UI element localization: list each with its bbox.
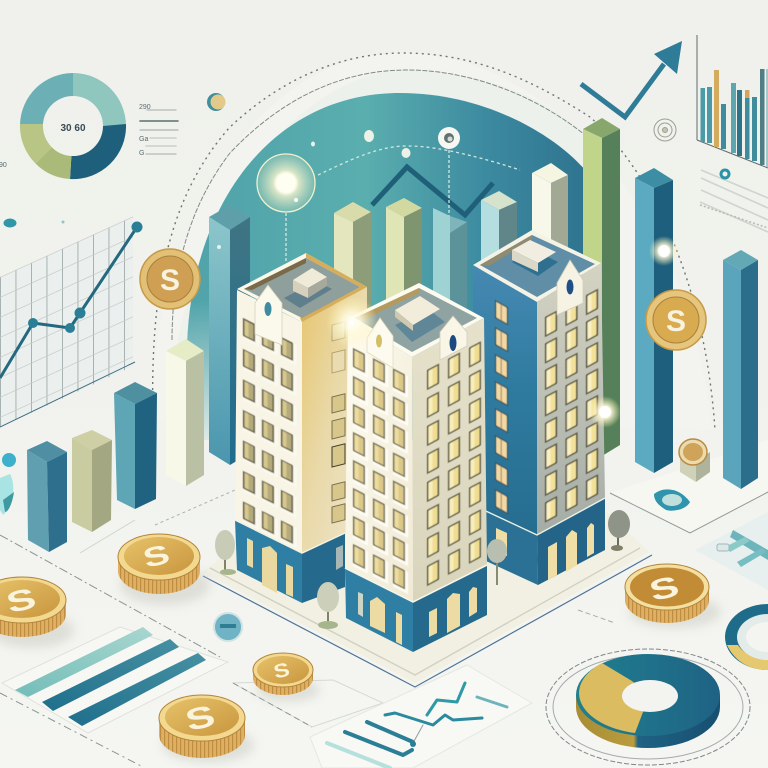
arch [255,285,282,345]
donut legend [139,104,178,157]
coin: top left: S [160,264,180,297]
chart line [0,227,137,378]
donut chart top left [20,73,126,179]
roof [348,283,484,357]
left facade [345,318,413,602]
partial donut right edge [725,604,768,670]
donut chart bottom right [546,649,750,765]
shield badge [654,489,690,511]
floor panels and dashed guide lines [0,440,768,767]
bar: teal left [114,382,157,509]
stripes chart bottom left [15,627,206,726]
bar: olive left [72,430,112,532]
base [345,568,413,652]
pale band behind dome [172,70,585,400]
coin: mid left: S [140,539,173,574]
left line chart with grid [0,216,142,427]
coin: mid left [118,534,210,605]
trees [215,510,630,629]
dome line chart [372,167,493,215]
coin: far left: S [2,582,40,619]
bar: olive tall right [583,118,620,456]
coin: bottom right [625,564,721,628]
base [473,505,538,585]
right windows [545,288,599,529]
bar: blue right 1 [635,168,673,473]
donut legend: G [139,150,144,157]
roof [237,253,367,322]
bar chart top right [697,35,768,168]
chart nodes [28,222,142,333]
left windows [351,347,409,600]
dome teal shape [187,93,585,440]
dome lower fade [183,300,213,460]
building 2 (center) [345,283,487,652]
bar: cream left [166,339,204,486]
hole [622,680,678,712]
dotted outer arc [153,53,715,430]
right windows [332,322,345,523]
left facade [473,265,537,535]
roof [473,230,601,302]
right data panel [695,512,768,590]
bar: cream dome 5 [532,163,568,280]
left facade [235,290,302,553]
donut center label: 30 60 [60,123,86,134]
coin: small center [253,653,320,702]
depth [576,695,720,748]
left windows [495,300,509,524]
donut legend: Ga [139,136,148,143]
faint wave lines right [700,170,768,232]
bar: teal tall left [209,205,250,465]
doors [247,538,343,597]
right facade [537,263,605,535]
coin: small center: S [271,658,292,683]
bottom line chart panel [310,665,532,768]
small floating tokens [0,93,226,228]
bar: blue right 2 [723,250,758,489]
bar: cream dome 1 [334,202,371,340]
dashed links and nodes [286,127,520,262]
building 3 (right) [473,230,605,585]
donut legend: 290 [139,104,151,111]
teal ring marker [721,170,729,178]
base [235,520,302,603]
coin: bottom right: S [645,570,683,607]
small teal badge [214,613,242,641]
arch left [367,318,393,368]
doors [358,587,477,645]
coin: bottom: S [181,698,219,738]
coin: top left [140,249,200,309]
trend arrow top right [581,41,682,117]
gold segment [579,663,650,733]
coin: right [646,290,706,350]
arch right [440,316,467,360]
building 1 (left) [235,253,367,603]
right facade [302,287,367,553]
roof unit [512,249,558,276]
small cream stub with coin [679,439,710,482]
coin: far left [0,577,74,648]
right windows [427,341,481,594]
inner dashed arc [172,70,585,340]
arch [557,260,583,315]
sun glow [257,154,315,212]
dome background [152,53,715,460]
chart baseline [0,362,135,427]
roof unit [395,309,445,342]
teal figure at left edge [0,453,16,515]
bar: olive dome 2 [386,198,422,340]
doors [496,523,594,580]
face [576,654,720,736]
roof unit [284,281,332,308]
light flares [326,236,679,428]
coin: right: S [666,305,686,338]
building platform [202,500,652,687]
outer rings [546,649,750,765]
bar: blue left [27,441,67,552]
coin: bottom [159,695,254,763]
right facade [412,318,487,602]
target icon [654,119,676,141]
left windows [241,317,298,559]
bar: light teal dome 3 [433,208,467,340]
bar: pale blue dome 4 [481,191,517,320]
